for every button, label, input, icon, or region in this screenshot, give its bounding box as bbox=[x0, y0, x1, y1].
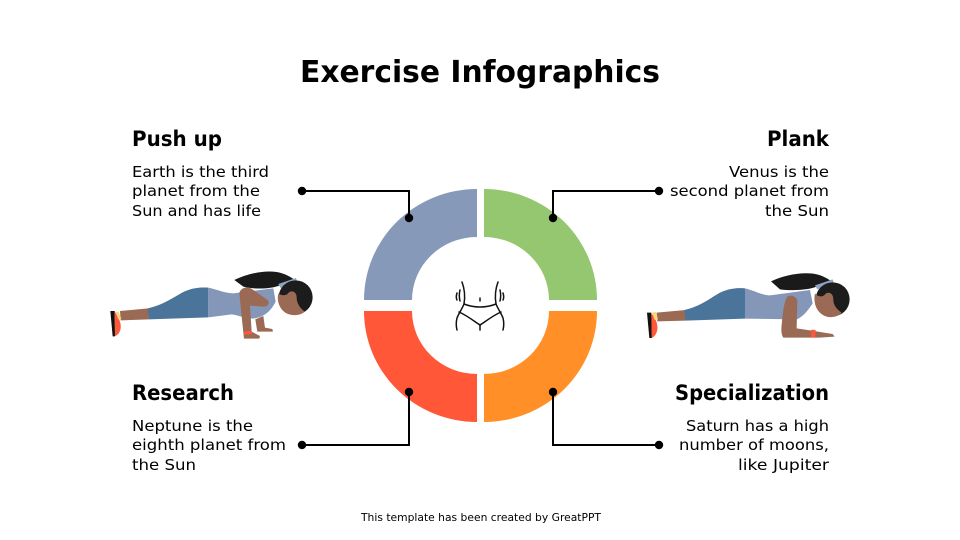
text: research: eighth planet from bbox=[132, 436, 286, 454]
icon: waist bbox=[456, 282, 504, 330]
text: push up bbox=[132, 163, 269, 220]
title: Exercise Infographics bbox=[300, 55, 660, 90]
text: specialization bbox=[679, 417, 830, 474]
heading: specialization: Specialization bbox=[675, 381, 829, 405]
text: push up: planet from the bbox=[132, 182, 260, 200]
text: specialization: like Jupiter bbox=[738, 456, 830, 474]
segment: research bbox=[364, 311, 477, 422]
connector: specialization bbox=[550, 389, 662, 448]
text: plank: the Sun bbox=[765, 202, 829, 220]
text: plank: Venus is the bbox=[729, 163, 829, 181]
text: research: Neptune is the bbox=[132, 417, 253, 435]
text: specialization: number of moons, bbox=[679, 436, 829, 454]
connector: plank bbox=[550, 188, 662, 221]
heading: research: Research bbox=[132, 381, 234, 405]
text: push up: Sun and has life bbox=[132, 202, 261, 220]
text: plank: second planet from bbox=[670, 182, 829, 200]
segment: plank bbox=[484, 189, 597, 300]
text: specialization: Saturn has a high bbox=[686, 417, 829, 435]
connector: push up bbox=[299, 188, 412, 221]
donut chart bbox=[364, 189, 597, 422]
footer: This template has been created by GreatPPT bbox=[360, 512, 602, 524]
text: plank bbox=[670, 163, 829, 220]
text: research: the Sun bbox=[132, 456, 196, 474]
figure: plank bbox=[647, 273, 850, 338]
heading: plank: Plank bbox=[767, 127, 830, 151]
text: push up: Earth is the third bbox=[132, 163, 269, 181]
figure: push up bbox=[110, 271, 313, 339]
text: research bbox=[132, 417, 286, 474]
heading: push up: Push up bbox=[132, 127, 222, 151]
segment: push up bbox=[364, 189, 477, 300]
connector: research bbox=[299, 389, 412, 448]
segment: specialization bbox=[484, 311, 597, 422]
